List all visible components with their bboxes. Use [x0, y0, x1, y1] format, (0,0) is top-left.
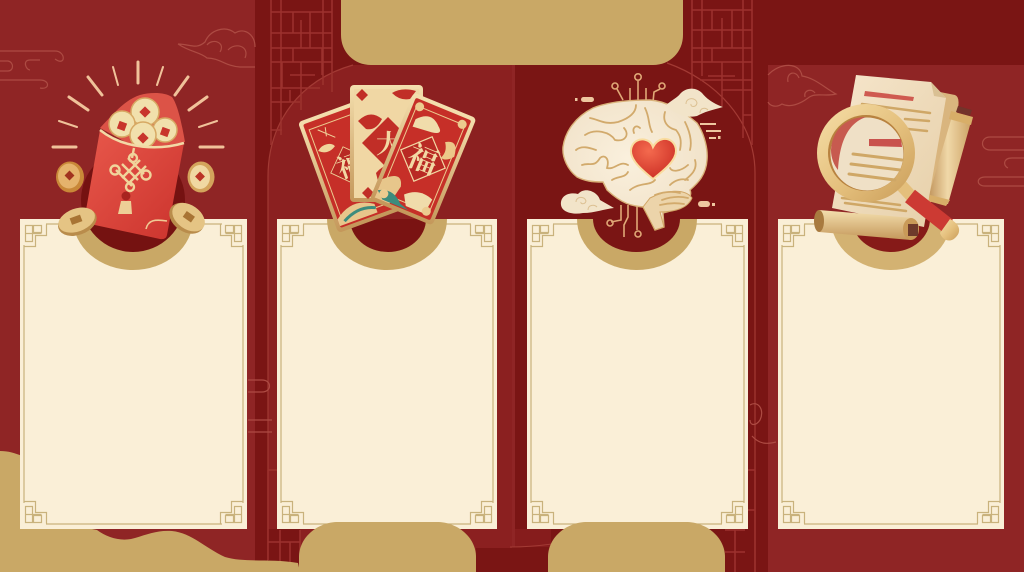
magnifier lens [817, 104, 915, 202]
top gold tab [341, 0, 683, 65]
coin bottom right [163, 196, 210, 240]
panel 1 card [20, 219, 247, 529]
left card [298, 99, 402, 233]
magnifier handle [900, 184, 959, 240]
side coin right [188, 162, 214, 192]
coins in the envelope [109, 98, 177, 148]
right card: 福 [402, 139, 443, 181]
coin bottom left [54, 202, 101, 241]
cerebellum and stem [643, 191, 692, 230]
middle card [350, 85, 423, 202]
envelope back flap [100, 93, 185, 150]
brain body [563, 100, 707, 230]
panel 2 card [277, 219, 497, 529]
bottom scroll [814, 210, 919, 240]
envelope corner fold [146, 220, 167, 229]
icon: document with magnifier [814, 75, 973, 240]
side coin left [56, 162, 84, 192]
circuit lines [607, 74, 665, 237]
tassel [118, 192, 132, 214]
panel 3 card [527, 219, 748, 529]
decorative clouds and lines [0, 29, 1024, 443]
half ring 1 [73, 148, 193, 270]
cloud top right [666, 89, 723, 117]
envelope body [85, 130, 184, 239]
lattice window patterns [268, 0, 755, 572]
document header bar [864, 91, 914, 101]
icon: red envelope with coins [53, 62, 223, 241]
rays [53, 62, 223, 147]
dashes [575, 97, 721, 207]
bottom gold tab 1 [299, 522, 476, 572]
wavy gold bottom shape [0, 451, 300, 572]
panel 4 card [778, 219, 1004, 529]
cloud bottom left [561, 190, 614, 214]
right card [369, 92, 477, 226]
half ring 4 [831, 219, 951, 270]
heart [631, 139, 676, 179]
document page [832, 75, 946, 227]
half ring 3 [577, 219, 697, 270]
chinese knot [110, 148, 150, 191]
document fold [931, 82, 946, 98]
icon: three playing cards [298, 85, 477, 233]
scroll behind the document [920, 92, 973, 206]
document text lines [842, 104, 930, 211]
bottom gold tab 2 [548, 522, 725, 572]
half ring 2 [327, 219, 447, 270]
middle card: 大 [376, 130, 402, 159]
brain folds [576, 105, 696, 205]
left card: 福 [333, 148, 367, 185]
icon: brain with heart [561, 74, 723, 237]
